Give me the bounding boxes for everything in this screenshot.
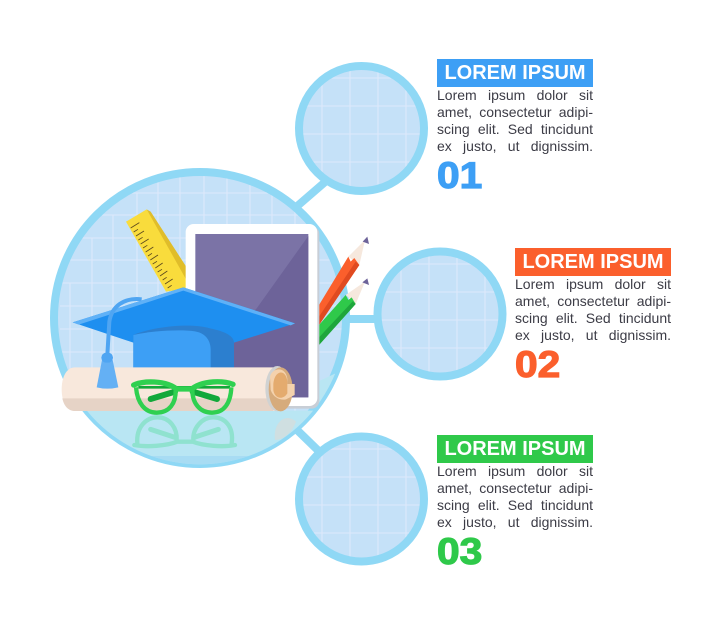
paragraph 01: Lorem ipsum dolor sit (437, 87, 593, 103)
tablet (186, 224, 319, 409)
paragraph 02: amet, consectetur adipi- (515, 293, 671, 309)
connector: middle (340, 315, 382, 323)
glasses (134, 382, 233, 413)
paragraph 01 (437, 87, 593, 154)
graduation cap (73, 287, 295, 370)
connector: top (295, 176, 332, 208)
circle 3 (295, 430, 430, 570)
text block 02 (515, 248, 671, 385)
text block 01 (437, 59, 593, 196)
paragraph 01: ex justo, ut dignissim. (437, 138, 593, 154)
illustration: graduation objects (60, 209, 369, 470)
paragraph 02: scing elit. Sed tincidunt (515, 310, 671, 326)
paragraph 03 (437, 463, 593, 530)
paragraph 03: amet, consectetur adipi- (437, 480, 593, 496)
large circle with grid (54, 172, 346, 470)
paragraph 01: amet, consectetur adipi- (437, 104, 593, 120)
paragraph 03: Lorem ipsum dolor sit (437, 463, 593, 479)
connector: bottom (295, 428, 332, 464)
circle 1 (295, 60, 430, 200)
circle 2 (373, 245, 507, 385)
heading 02: LOREM IPSUM (522, 251, 664, 273)
pencils (319, 237, 369, 345)
text block 03 (437, 435, 593, 572)
paragraph 02: Lorem ipsum dolor sit (515, 276, 671, 292)
infographic artwork (50, 62, 506, 566)
paragraph 01: scing elit. Sed tincidunt (437, 121, 593, 137)
paragraph 02 (515, 276, 671, 343)
paragraph 02: ex justo, ut dignissim. (515, 327, 671, 343)
tassel (97, 353, 118, 389)
heading 01: LOREM IPSUM (444, 62, 586, 84)
paragraph 03: scing elit. Sed tincidunt (437, 497, 593, 513)
table reflection surface (87, 374, 335, 464)
paragraph 03: ex justo, ut dignissim. (437, 514, 593, 530)
heading 03: LOREM IPSUM (444, 438, 586, 460)
number 03: 03 (437, 531, 482, 572)
number 02: 02 (515, 344, 560, 385)
reflection of glasses (134, 417, 235, 446)
number 01: 01 (437, 155, 482, 196)
ruler (126, 209, 188, 292)
scroll (62, 366, 295, 411)
